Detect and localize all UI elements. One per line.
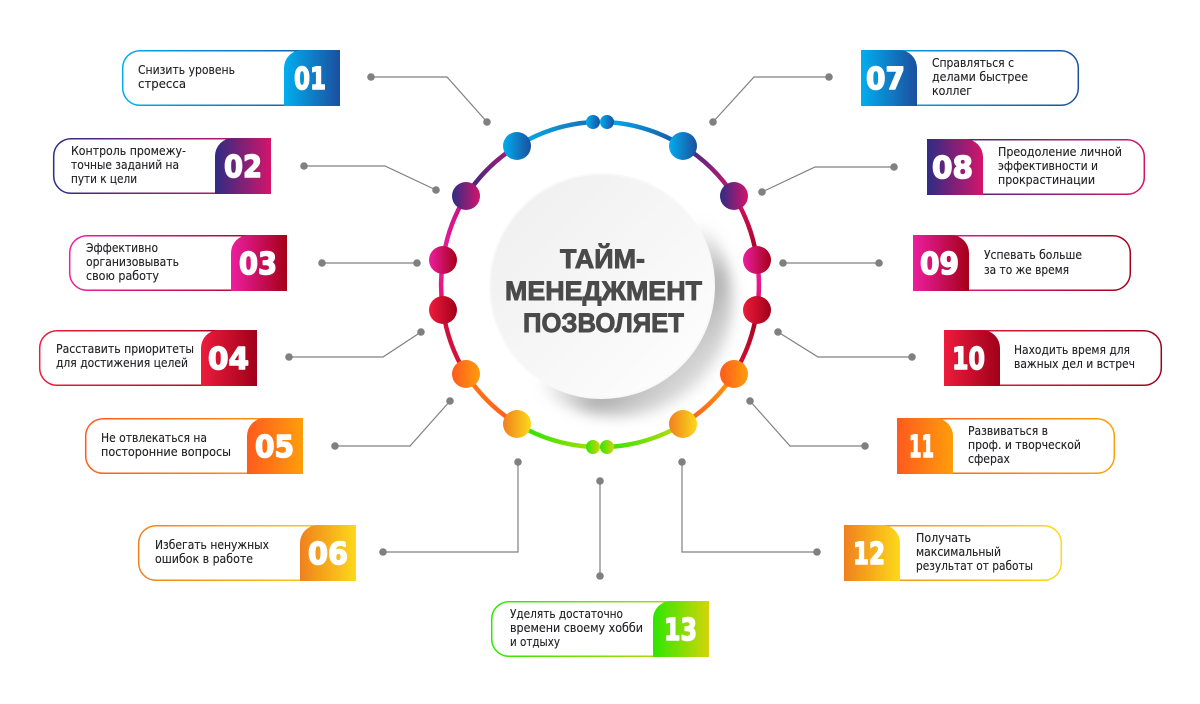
connector 04 (285, 328, 425, 361)
card 03: свою работу (86, 269, 159, 283)
card 12 (844, 525, 1061, 581)
card 02 (54, 138, 271, 194)
card 08: эффективности и (998, 159, 1098, 173)
card 03: 03 (239, 247, 277, 282)
card 04 (40, 330, 257, 386)
card 11: Развиваться в (968, 424, 1048, 438)
card 05 (86, 418, 303, 474)
card 06: ошибок в работе (155, 552, 253, 566)
card 08: 08 (932, 151, 973, 186)
card 01: 01 (294, 62, 326, 97)
card 07: делами быстрее (932, 70, 1028, 84)
card 04: 04 (208, 342, 249, 377)
card 13: Уделять достаточно (510, 607, 623, 621)
card 06: Избегать ненужных (155, 538, 269, 552)
connector 08 (758, 163, 898, 196)
card 13: 13 (664, 613, 697, 648)
card 12: 12 (853, 537, 885, 572)
card 12: результат от работы (916, 559, 1033, 573)
title: МЕНЕДЖМЕНТ (505, 276, 702, 306)
card 01: Снизить уровень (138, 63, 235, 77)
card 06 (139, 525, 356, 581)
ring nodes (429, 115, 771, 454)
card 02: Контроль промежу- (71, 144, 186, 158)
center disc shadow (502, 186, 732, 416)
ring (441, 122, 759, 447)
card 03 (70, 235, 287, 291)
card 05: 05 (255, 430, 294, 465)
card 12: максимальный (916, 545, 1001, 559)
card 08: прокрастинации (998, 173, 1095, 187)
connector 05 (331, 397, 454, 450)
connector 07 (709, 73, 833, 126)
card 09: за то же время (984, 263, 1069, 277)
card 11: сферах (968, 452, 1010, 466)
card 13 (492, 601, 709, 657)
card 10 (944, 330, 1161, 386)
card 07: коллег (932, 84, 972, 98)
card 05: посторонние вопросы (101, 445, 231, 459)
card 02: 02 (224, 150, 262, 185)
title (505, 243, 702, 338)
connector 13 (596, 477, 604, 580)
title: ТАЙМ- (560, 243, 645, 274)
card 11 (897, 418, 1114, 474)
card 01 (123, 50, 340, 106)
connector 12 (678, 458, 821, 556)
card 08 (927, 139, 1144, 195)
card 07: Справляться с (932, 56, 1014, 70)
connector 02 (300, 162, 440, 194)
card 09: 09 (920, 247, 959, 282)
center disc (490, 174, 714, 398)
card 02: пути к цели (71, 172, 137, 186)
card 10: Находить время для (1014, 343, 1130, 357)
card 02: точные заданий на (71, 158, 179, 172)
card 10: 10 (952, 342, 985, 377)
connector 11 (746, 397, 869, 450)
card 08: Преодоление личной (998, 145, 1122, 159)
connector 10 (774, 328, 916, 361)
card 01: стресса (138, 77, 186, 91)
card 13: и отдыху (510, 635, 560, 649)
card 04: для достижения целей (56, 356, 188, 370)
card 10: важных дел и встреч (1014, 357, 1135, 371)
card 07 (861, 50, 1078, 106)
connector 09 (779, 259, 883, 267)
card 03: Эффективно (86, 241, 158, 255)
card 12: Получать (916, 531, 971, 545)
card 09: Успевать больше (984, 248, 1082, 262)
connector 01 (367, 73, 491, 126)
card 05: Не отвлекаться на (101, 431, 207, 445)
connector 06 (379, 458, 522, 556)
card 03: организовывать (86, 255, 179, 269)
card 11: 11 (909, 430, 934, 465)
title: ПОЗВОЛЯЕТ (523, 308, 684, 338)
connector 03 (318, 259, 421, 267)
card 13: времени своему хобби (510, 621, 643, 635)
card 09 (913, 235, 1130, 291)
card 07: 07 (866, 62, 905, 97)
card 06: 06 (308, 537, 348, 572)
card 11: проф. и творческой (968, 438, 1081, 452)
card 04: Расставить приоритеты (56, 342, 194, 356)
